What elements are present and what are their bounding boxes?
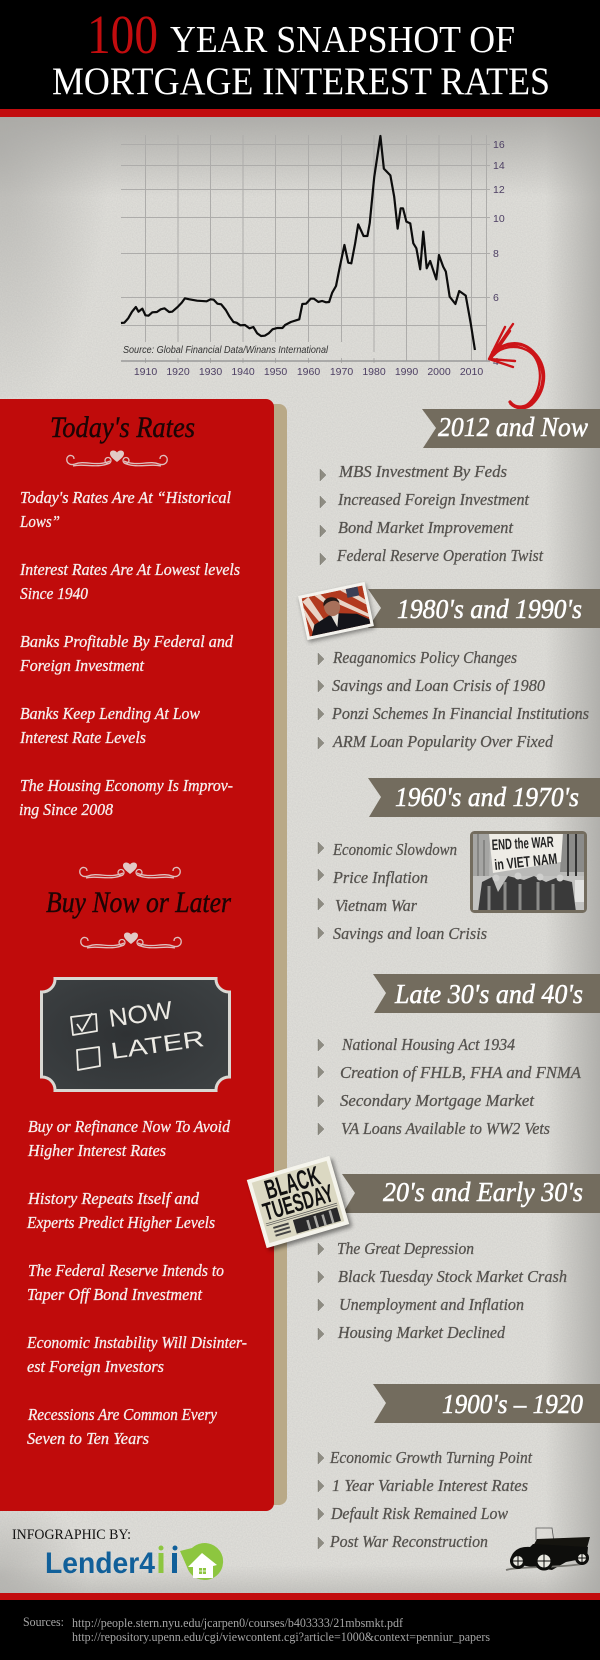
x axis labels: 1910 (134, 366, 157, 378)
photo: Black Tuesday newspaper (247, 1155, 352, 1252)
list: 20s and early 30s: Black Tuesday Stock Market Crash (338, 1267, 567, 1286)
photo: Black Tuesday newspaper: TUESDAY (260, 1179, 337, 1227)
arrow: hand-drawn red pointer to current rate (489, 324, 544, 409)
title banner (0, 0, 600, 117)
list: 1980s and 1990s (318, 648, 589, 751)
photo: Vietnam war protest (472, 832, 586, 912)
list: late 30s and 40s: National Housing Act 1934 (341, 1035, 515, 1054)
list: 20s and early 30s: Housing Market Declined (337, 1323, 505, 1342)
credit: infographic by: INFOGRAPHIC BY: (12, 1527, 131, 1543)
ornament (81, 933, 181, 948)
list: today's rates: ing Since 2008 (19, 800, 113, 819)
photo: Reagan at flag (298, 582, 375, 643)
chalkboard: now or later: NOW (107, 996, 175, 1033)
list: 2012 and now (320, 462, 544, 565)
list: 1900s to 1920 (318, 1448, 533, 1551)
title: line one: YEAR SNAPSHOT OF (170, 19, 515, 61)
list: 1960s and 1970s: Economic Slowdown (332, 840, 457, 859)
chart source note: Source: Global Financial Data/Winans International (123, 345, 329, 356)
footer band (0, 1593, 600, 1660)
x axis labels: 2010 (460, 366, 483, 378)
list: 1960s and 1970s: Vietnam War (335, 896, 417, 915)
ribbon: 1980's and 1990's: 1980's and 1990's (397, 594, 582, 624)
list: today's rates: Lows” (19, 512, 60, 531)
list: today's rates (19, 488, 240, 819)
y axis labels: 8 (493, 248, 499, 260)
list: buy now or later: The Federal Reserve Intends to (28, 1261, 224, 1280)
list: 1980s and 1990s: Reaganomics Policy Changes (332, 648, 517, 667)
list: 1980s and 1990s: ARM Loan Popularity Over Fixed (332, 732, 553, 751)
y axis labels: 14 (493, 160, 505, 172)
ribbon: 20's and Early 30's (342, 1174, 600, 1213)
list: 20s and early 30s (318, 1239, 567, 1342)
panel: red sidebar (0, 399, 274, 1511)
list: 1960s and 1970s: Savings and loan Crisis (333, 924, 487, 943)
headline: BLACK (261, 1160, 324, 1205)
panel: tan backing (240, 404, 287, 1505)
list: 20s and early 30s: The Great Depression (337, 1239, 474, 1258)
ribbon: Late 30's and 40's: Late 30's and 40's (394, 979, 583, 1009)
list: 1960s and 1970s (318, 840, 487, 943)
x axis labels: 1920 (166, 366, 190, 378)
logo: Lender4: Lender4 (45, 1547, 155, 1580)
list: today's rates: Interest Rates Are At Lowest levels (19, 560, 240, 579)
list: 2012 and now: Federal Reserve Operation Twist (336, 546, 544, 565)
list: buy now or later: Seven to Ten Years (27, 1429, 149, 1448)
icon: vintage car (506, 1528, 590, 1570)
list: today's rates: Interest Rate Levels (19, 728, 146, 747)
ribbon: 1900's - 1920: 1900's – 1920 (442, 1389, 583, 1419)
sources link two: http://repository.upenn.edu/cgi/viewcontent.cgi?article=1000&context=penniur_papers (72, 1629, 490, 1644)
list: 1900s to 1920: Economic Growth Turning Point (329, 1448, 533, 1467)
list: late 30s and 40s: VA Loans Available to WW2 Vets (341, 1119, 550, 1138)
chalkboard: now or later (42, 978, 230, 1090)
x axis labels: 1980 (362, 366, 386, 378)
x axis labels: 1970 (330, 366, 353, 378)
list: today's rates: The Housing Economy Is Improv- (20, 776, 233, 795)
sources link one: http://people.stern.nyu.edu/jcarpen0/courses/b403333/21mbsmkt.pdf (72, 1615, 404, 1630)
ornament (80, 863, 180, 878)
line chart: mortgage interest rates 1900s to 2010s (121, 135, 505, 378)
x axis labels: 1960 (297, 366, 320, 378)
logo: Lender4 (45, 1543, 223, 1580)
list: 1900s to 1920: 1 Year Variable Interest Rates (332, 1476, 528, 1495)
list: 1980s and 1990s: Ponzi Schemes In Financial Institutions (331, 704, 589, 723)
y axis labels: 6 (493, 292, 499, 304)
sources label: Sources: (23, 1614, 64, 1629)
ribbon: 1960's and 1970's (368, 778, 600, 817)
title: 100: 100 (87, 4, 158, 65)
list: buy now or later: Taper Off Bond Investment (27, 1285, 203, 1304)
list: 2012 and now: Bond Market Improvement (338, 518, 514, 537)
photo: Vietnam war protest: in VIET NAM (494, 850, 558, 874)
rate line (121, 136, 475, 350)
y axis labels: 12 (493, 184, 505, 196)
ribbon: 1900's - 1920 (373, 1384, 600, 1423)
y axis labels (493, 139, 505, 368)
list: 1980s and 1990s: Savings and Loan Crisis of 1980 (332, 676, 545, 695)
heading: Buy Now or Later: Buy Now or Later (46, 886, 231, 919)
list: today's rates: Today's Rates Are At “Historical (20, 488, 231, 507)
list: buy now or later: History Repeats Itself and (27, 1189, 199, 1208)
list: 20s and early 30s: Unemployment and Inflation (339, 1295, 524, 1314)
ribbon: 2012 and Now: 2012 and Now (438, 412, 588, 442)
list: buy now or later: Buy or Refinance Now To Avoid (28, 1117, 230, 1136)
ribbon: 20's and Early 30's: 20's and Early 30's (383, 1177, 583, 1207)
list: today's rates: Foreign Investment (19, 656, 145, 675)
list: late 30s and 40s: Creation of FHLB, FHA and FNMA (340, 1063, 582, 1082)
x axis labels: 1940 (231, 366, 255, 378)
list: today's rates: Since 1940 (20, 584, 88, 603)
ribbon: 1980's and 1990's (368, 589, 600, 628)
list: 1900s to 1920: Post War Reconstruction (329, 1532, 488, 1551)
x axis labels: 1990 (395, 366, 418, 378)
x axis labels: 1950 (264, 366, 287, 378)
ribbon: Late 30's and 40's (373, 974, 600, 1013)
list: late 30s and 40s: Secondary Mortgage Market (340, 1091, 535, 1110)
ornament (67, 451, 167, 466)
x axis labels: 1930 (199, 366, 222, 378)
title: line two: MORTGAGE INTEREST RATES (52, 60, 550, 103)
list: today's rates: Banks Keep Lending At Low (20, 704, 201, 723)
x axis labels (134, 366, 483, 378)
list: buy now or later: Recessions Are Common Every (27, 1405, 217, 1424)
y axis labels: 4 (493, 356, 499, 368)
ribbon: 1960's and 1970's: 1960's and 1970's (395, 782, 579, 812)
y axis labels: 10 (493, 213, 505, 225)
heading: Today's Rates: Today's Rates (50, 411, 195, 444)
list: buy now or later: est Foreign Investors (27, 1357, 164, 1376)
list: 2012 and now: MBS Investment By Feds (338, 462, 507, 481)
photo: Vietnam war protest: END the WAR (491, 834, 554, 854)
chalkboard: now or later: LATER (109, 1025, 206, 1064)
list: 1900s to 1920: Default Risk Remained Low (330, 1504, 509, 1523)
list: buy now or later: Higher Interest Rates (27, 1141, 166, 1160)
ribbon: 2012 and Now (422, 409, 600, 448)
y axis labels: 16 (493, 139, 505, 151)
list: buy now or later: Experts Predict Higher Levels (26, 1213, 215, 1232)
x axis labels: 2000 (427, 366, 451, 378)
list: buy now or later (26, 1117, 247, 1448)
list: today's rates: Banks Profitable By Federal and (20, 632, 233, 651)
list: late 30s and 40s (318, 1035, 582, 1138)
list: 2012 and now: Increased Foreign Investment (337, 490, 530, 509)
list: 1960s and 1970s: Price Inflation (332, 868, 428, 887)
list: buy now or later: Economic Instability Will Disinter- (26, 1333, 247, 1352)
